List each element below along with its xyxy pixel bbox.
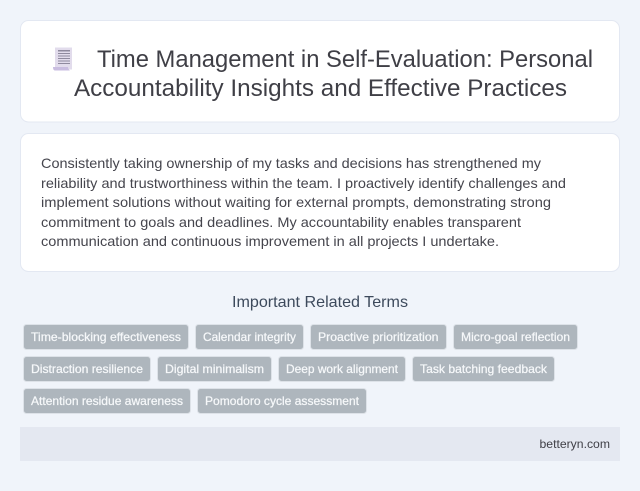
title: Accountability Insights and Effective Practices — [74, 75, 567, 102]
tag: Attention residue awareness: Attention residue awareness — [31, 394, 183, 408]
tag: Proactive prioritization — [310, 324, 446, 350]
tag: Calendar integrity: Calendar integrity — [203, 330, 296, 344]
footer bar — [20, 427, 620, 461]
tag: Pomodoro cycle assessment: Pomodoro cycle assessment — [205, 394, 360, 408]
tag: Task batching feedback: Task batching feedback — [420, 362, 548, 376]
tag: Micro-goal reflection — [454, 324, 578, 350]
tag: Distraction resilience: Distraction resilience — [31, 362, 143, 376]
heading: related terms: Important Related Terms — [232, 294, 408, 311]
summary paragraph: implement solutions without waiting for external prompts, demonstrating strong — [41, 194, 551, 210]
tag: Deep work alignment: Deep work alignment — [286, 362, 399, 376]
icon: receipt — [53, 48, 72, 70]
tag: Time-blocking effectiveness — [24, 324, 188, 350]
footer credit: betteryn.com — [540, 437, 610, 451]
term tags — [24, 324, 578, 414]
panel: title card — [20, 20, 620, 122]
tag: Time-blocking effectiveness: Time-blocking effectiveness — [31, 330, 181, 344]
summary paragraph: communication and continuous improvement in all projects I undertake. — [41, 233, 499, 249]
panel: summary text — [20, 134, 620, 272]
summary paragraph — [41, 155, 566, 249]
summary paragraph: reliability and trustworthiness within the team. I proactively identify challenges and — [41, 175, 566, 191]
tag: Digital minimalism — [158, 356, 272, 382]
tag: Digital minimalism: Digital minimalism — [165, 362, 264, 376]
tag: Pomodoro cycle assessment — [198, 388, 366, 414]
tag: Attention residue awareness — [24, 388, 190, 414]
tag: Calendar integrity — [196, 324, 304, 350]
title — [74, 46, 593, 102]
tag: Distraction resilience — [24, 356, 150, 382]
summary paragraph: Consistently taking ownership of my tasks and decisions has strengthened my — [41, 155, 541, 171]
tag: Task batching feedback — [412, 356, 554, 382]
summary paragraph: commitment to goals and deadlines. My accountability enables transparent — [41, 214, 521, 230]
tag: Proactive prioritization: Proactive prioritization — [318, 330, 438, 344]
tag: Micro-goal reflection: Micro-goal reflection — [461, 330, 570, 344]
title: Time Management in Self-Evaluation: Personal — [97, 46, 593, 73]
tag: Deep work alignment — [278, 356, 406, 382]
